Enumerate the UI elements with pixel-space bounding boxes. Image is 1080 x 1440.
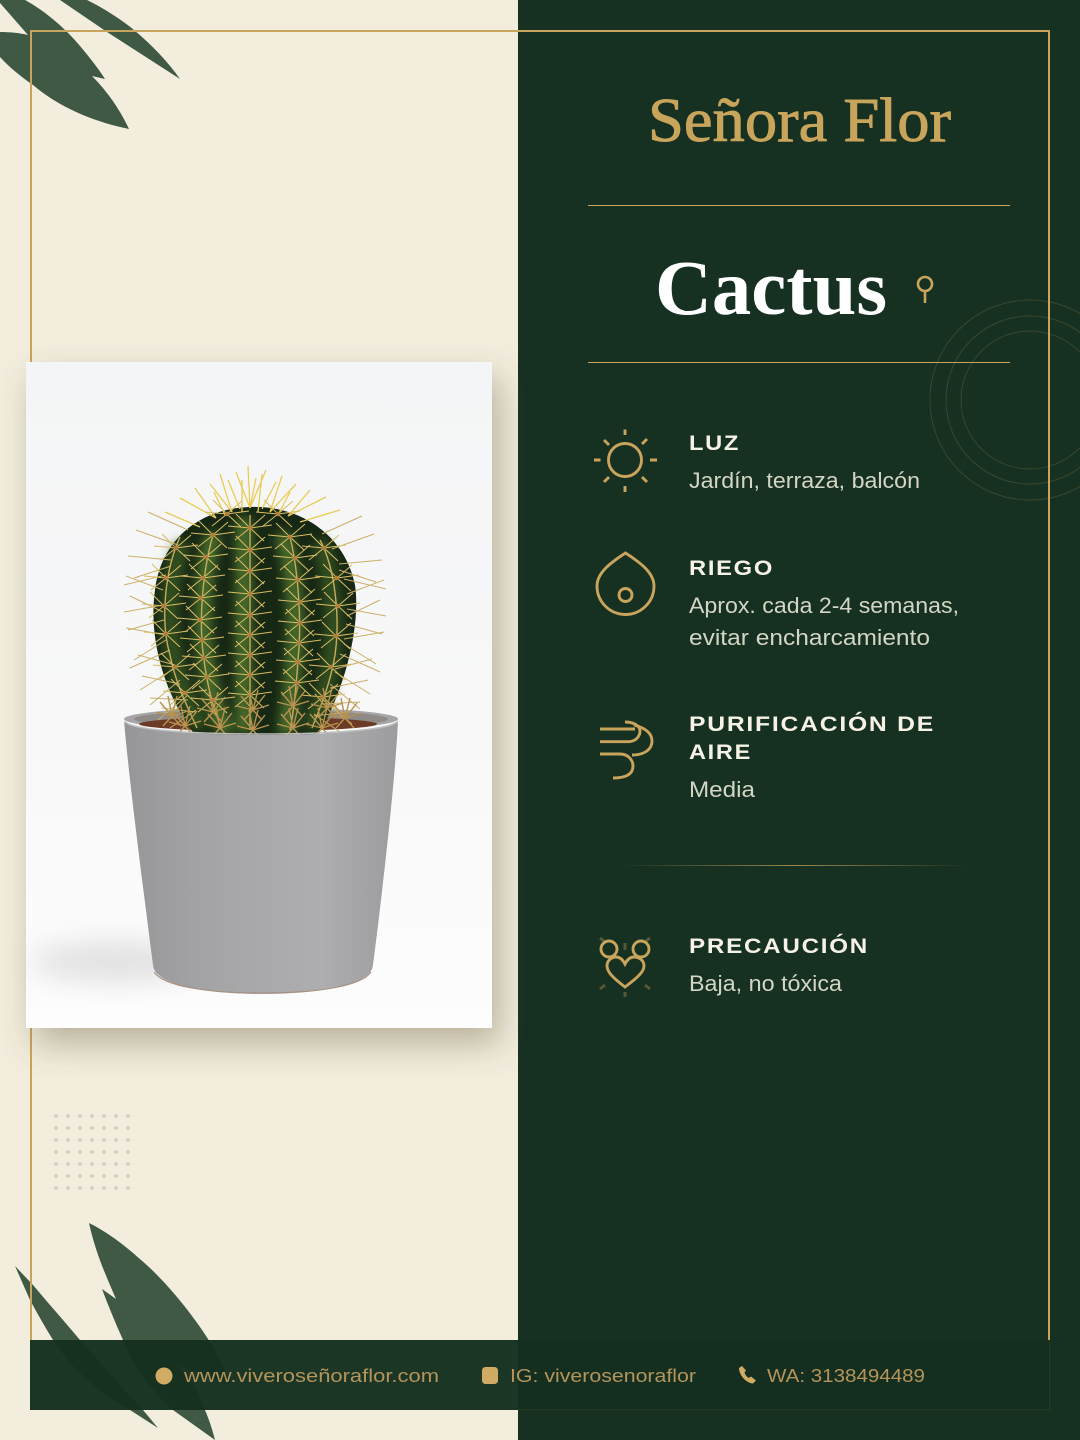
pot interior [124, 708, 398, 731]
icon: sun [594, 430, 657, 492]
panel: dark green right background [518, 0, 1080, 1440]
website: www.viveroseñoraflor.com [183, 1365, 439, 1386]
cactus rib ridge lines [165, 515, 337, 730]
icon: pin symbol [918, 277, 932, 303]
care item: light [594, 430, 920, 493]
cactus rib shading [170, 525, 334, 728]
cactus spine clusters [142, 500, 360, 713]
icon: web dot [156, 1368, 172, 1384]
footer bar [30, 1340, 1050, 1410]
footer outline on dark side [518, 1340, 1050, 1410]
whatsapp: WA: 3138494489 [767, 1365, 925, 1386]
divider [588, 362, 1010, 363]
label: PRECAUCION: PRECAUCIÓN [689, 934, 869, 958]
description: watering: Aprox. cada 2-4 semanas, [689, 593, 959, 618]
description: light: Jardín, terraza, balcón [689, 468, 920, 493]
decorative leaves top left [0, 0, 180, 129]
icon: wind [600, 722, 652, 778]
footer background [30, 1340, 1050, 1410]
label: air purification: AIRE [689, 741, 752, 764]
description: watering: evitar encharcamiento [689, 625, 930, 650]
decorative dot grid [50, 1110, 134, 1194]
label: LUZ: LUZ [689, 432, 740, 455]
panel: cream left background [0, 0, 518, 1440]
icon: instagram square [482, 1367, 498, 1384]
instagram: IG: viverosenoraflor [510, 1365, 696, 1386]
cactus outer spine fringe [124, 512, 196, 728]
plant name: Cactus [655, 244, 887, 331]
icon: water drop [597, 553, 654, 614]
cactus top yellow spines [165, 466, 340, 527]
label: RIEGO: RIEGO [689, 557, 774, 580]
grey pot front [124, 720, 398, 994]
cactus [124, 466, 386, 740]
description: caution: Baja, no tóxica [689, 971, 843, 996]
label: air purification: PURIFICACIÓN DE [689, 712, 935, 736]
decorative leaves bottom left [15, 1223, 231, 1440]
care item: watering [597, 553, 959, 650]
photo background [26, 362, 492, 1028]
divider [588, 205, 1010, 206]
cactus base tan spines [156, 686, 361, 740]
care item: caution [600, 934, 869, 997]
cactus body [153, 507, 356, 735]
description: air purification: Media [689, 777, 756, 802]
care item: air purification [600, 712, 935, 802]
icon: heart with circles [600, 938, 650, 997]
gradient divider [620, 865, 970, 866]
product photo: cactus in grey pot [26, 362, 492, 1028]
description: watering [689, 593, 959, 650]
decorative concentric circles [930, 300, 1080, 500]
pot ground shadow [30, 942, 200, 982]
label: air purification [689, 712, 935, 764]
icon: phone [739, 1366, 756, 1384]
brand title: Señora Flor [648, 87, 951, 155]
